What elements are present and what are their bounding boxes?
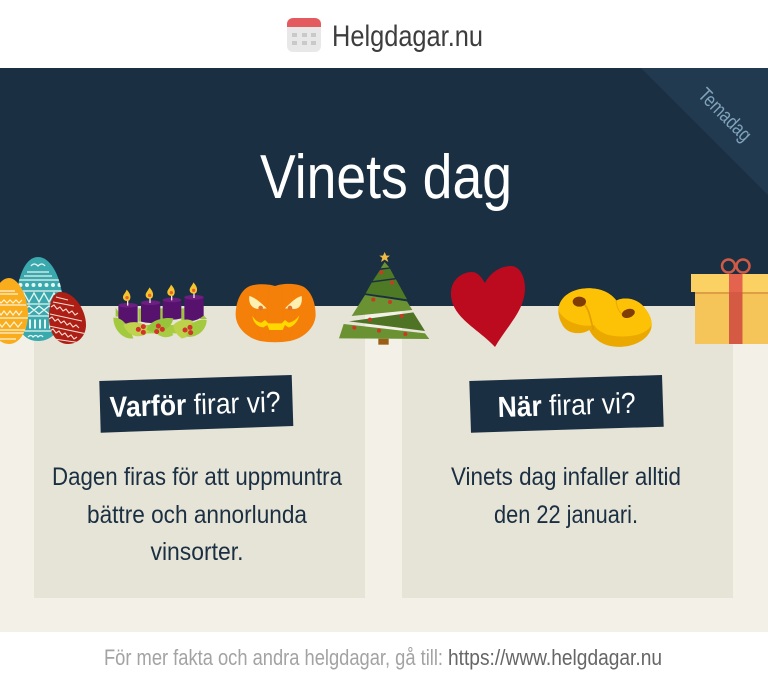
icon: christmas tree bbox=[339, 252, 429, 345]
text block: why: vinsorter. bbox=[150, 538, 244, 566]
text block: when: den 22 januari. bbox=[494, 501, 638, 529]
text block: when: Vinets dag infaller alltid bbox=[451, 463, 681, 491]
heading: Varför firar vi?: Varför firar vi? bbox=[109, 387, 281, 424]
icon: advent candles bbox=[113, 282, 207, 339]
text block: why: bättre och annorlunda bbox=[87, 501, 307, 529]
corner ribbon: Temadag: Temadag bbox=[693, 84, 756, 146]
heading: När firar vi?: När firar vi? bbox=[497, 388, 636, 424]
footer: För mer fakta och andra helgdagar, gå till: bbox=[104, 645, 443, 670]
text block: why bbox=[52, 463, 342, 566]
icon: heart bbox=[451, 266, 525, 347]
page background bbox=[0, 306, 768, 632]
footer: https://www.helgdagar.nu bbox=[448, 645, 662, 670]
text block: why: Dagen firas för att uppmuntra bbox=[52, 463, 342, 491]
heading: När firar vi? bbox=[469, 375, 664, 433]
icon: pumpkin bbox=[236, 284, 316, 342]
icon: easter eggs bbox=[0, 257, 87, 344]
title: Vinets dag bbox=[260, 143, 512, 212]
panel: När firar vi bbox=[402, 306, 733, 598]
logo: Helgdagar.nu bbox=[287, 18, 483, 53]
header band bbox=[0, 68, 768, 306]
icon: gift box bbox=[691, 260, 768, 344]
corner ribbon: Temadag bbox=[641, 68, 768, 195]
text block: when bbox=[451, 463, 681, 529]
site name: Helgdagar.nu bbox=[332, 20, 483, 53]
icon: lussekatt bun bbox=[558, 288, 652, 347]
icon: calendar bbox=[287, 18, 321, 52]
panel: Varför firar vi bbox=[34, 306, 365, 598]
heading: Varför firar vi? bbox=[99, 375, 293, 433]
